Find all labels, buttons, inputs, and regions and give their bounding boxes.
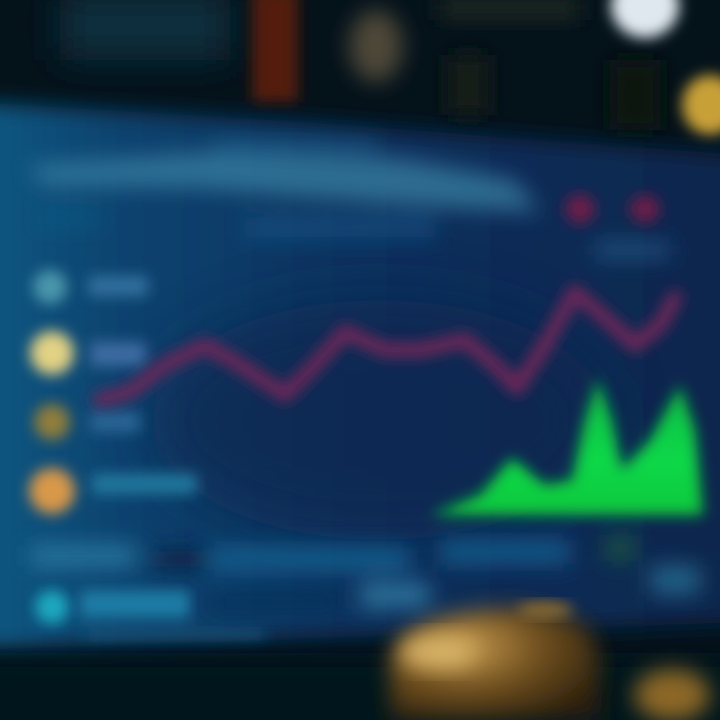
bottom dark bezel <box>0 660 720 720</box>
red blurred object <box>252 0 298 102</box>
gold coins <box>390 602 710 720</box>
red icons <box>565 194 660 224</box>
screen dark centre <box>150 300 610 540</box>
title text block <box>30 140 670 258</box>
top background blobs <box>60 0 720 135</box>
panel: screen <box>0 102 720 650</box>
legend markers <box>29 270 75 624</box>
legend labels <box>80 276 265 638</box>
line chart <box>100 292 675 400</box>
area chart <box>430 378 703 515</box>
beige blurred object <box>349 10 403 82</box>
yellow light <box>682 75 720 135</box>
white light <box>611 0 679 38</box>
lower table text <box>30 535 700 609</box>
